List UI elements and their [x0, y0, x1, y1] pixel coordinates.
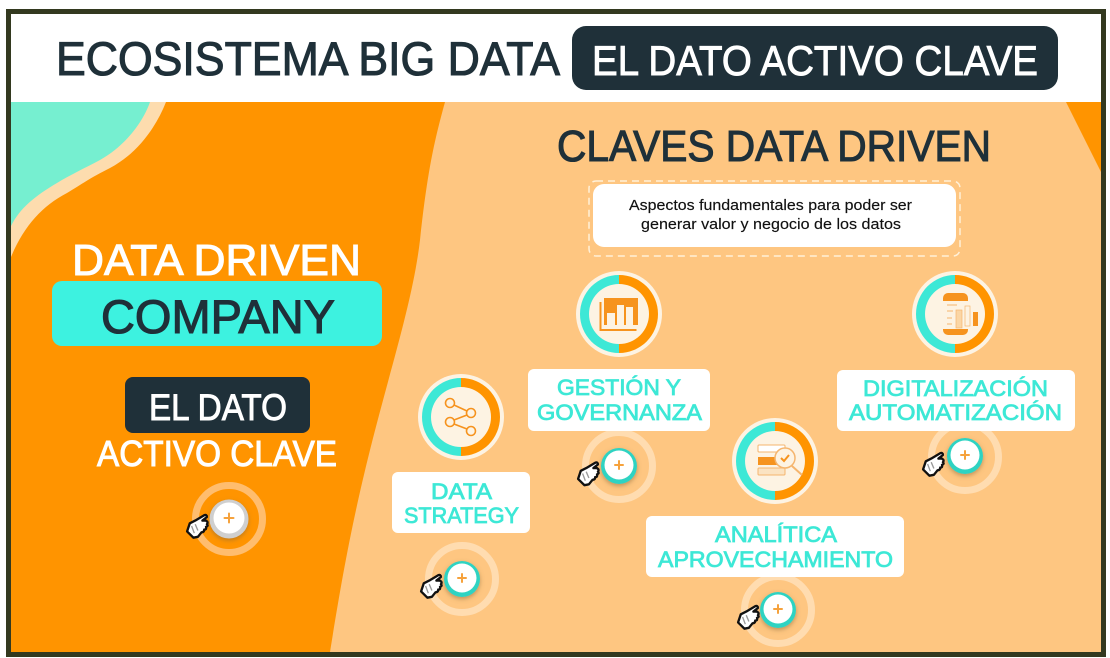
header title [56, 26, 1058, 90]
item: digitalizacion automatizacion [837, 271, 1075, 490]
activo clave text: ACTIVO CLAVE [97, 433, 337, 474]
button [578, 432, 652, 500]
label: GESTIÓN Y [557, 375, 681, 400]
title pill: EL DATO ACTIVO CLAVE [592, 37, 1038, 84]
callout: aspectos fundamentales [589, 181, 960, 256]
el dato label [125, 377, 310, 433]
label [646, 516, 904, 577]
button [738, 576, 812, 644]
label [392, 472, 530, 533]
button [923, 424, 998, 490]
item: gestion y governanza [528, 271, 710, 500]
company banner: COMPANY [101, 290, 335, 343]
data driven text: DATA DRIVEN [72, 236, 361, 285]
company banner [52, 281, 382, 346]
callout: aspectos fundamentales: generar valor y negocio de los datos [641, 217, 901, 233]
left heading: data driven company [52, 236, 382, 346]
label [837, 370, 1075, 431]
el dato activo clave [97, 377, 337, 474]
label: DATA [431, 479, 492, 504]
label: ANALÍTICA [715, 522, 837, 547]
icon: bar chart [576, 271, 662, 357]
icon: network [418, 374, 504, 460]
decorative teal corner [11, 102, 150, 226]
icon: server magnifier [732, 418, 818, 504]
label [528, 369, 710, 431]
callout: aspectos fundamentales: Aspectos fundamentales para poder ser [629, 198, 912, 214]
label: AUTOMATIZACIÓN [849, 400, 1062, 425]
icon: mobile chart [912, 271, 998, 357]
top right orange corner [1066, 102, 1101, 172]
button [421, 546, 496, 612]
left orange panel [11, 102, 445, 652]
label: GOVERNANZA [537, 400, 702, 425]
item: data strategy [392, 374, 530, 612]
button: left plus [187, 486, 262, 552]
title text: ECOSISTEMA BIG DATA [56, 32, 561, 85]
el dato label: EL DATO [149, 387, 287, 428]
item: analitica aprovechamiento [646, 418, 904, 644]
label: APROVECHAMIENTO [658, 547, 893, 572]
heading: claves data driven: CLAVES DATA DRIVEN [557, 122, 991, 171]
decorative peach wave [11, 102, 166, 257]
label: DIGITALIZACIÓN [863, 376, 1048, 401]
label: STRATEGY [404, 503, 519, 528]
title pill [572, 26, 1058, 90]
